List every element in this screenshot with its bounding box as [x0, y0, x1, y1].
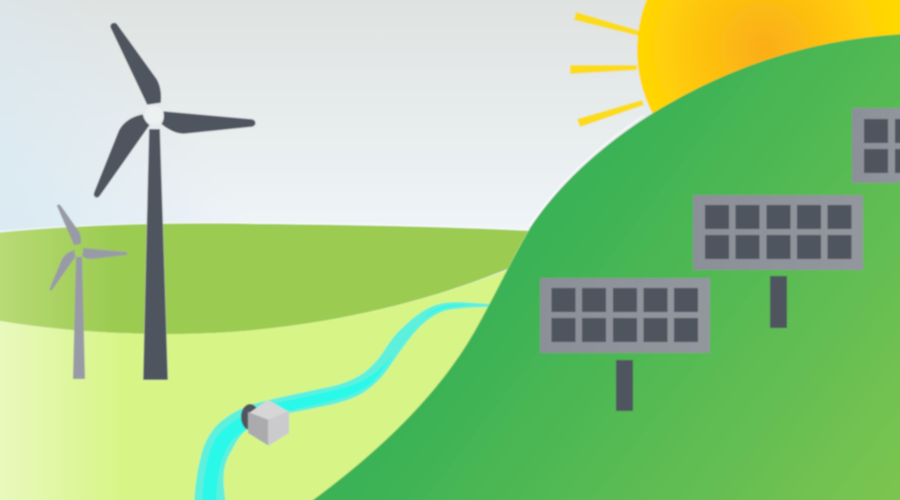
foreground meadow [0, 268, 530, 500]
turbine tower [143, 129, 168, 380]
hydro turbine block on river [241, 400, 289, 446]
small turbine tower [73, 257, 85, 379]
back hill [0, 223, 532, 334]
pipe opening [241, 404, 259, 430]
cube left face [248, 412, 269, 446]
cube right face [268, 411, 289, 446]
panel cells [705, 205, 852, 259]
panel cells [552, 288, 698, 342]
icon: sun rays [570, 12, 644, 127]
panel frame [852, 108, 900, 183]
river [194, 302, 490, 500]
cube top face [249, 400, 289, 424]
solar panel: lower [540, 278, 710, 411]
panel frame [693, 195, 863, 270]
panel frame [540, 278, 710, 353]
small wind turbine [50, 204, 128, 379]
big green hill [306, 34, 900, 500]
turbine hub [145, 106, 163, 124]
sun [570, 0, 900, 188]
large wind turbine [94, 23, 256, 380]
solar panel: middle [693, 195, 863, 328]
panel post [770, 276, 787, 328]
small turbine blades [57, 204, 81, 245]
turbine blades [94, 23, 256, 198]
solar panel: upper right [852, 108, 900, 183]
sun disc [637, 0, 900, 188]
panel cells [864, 119, 900, 173]
panel post [616, 360, 633, 411]
